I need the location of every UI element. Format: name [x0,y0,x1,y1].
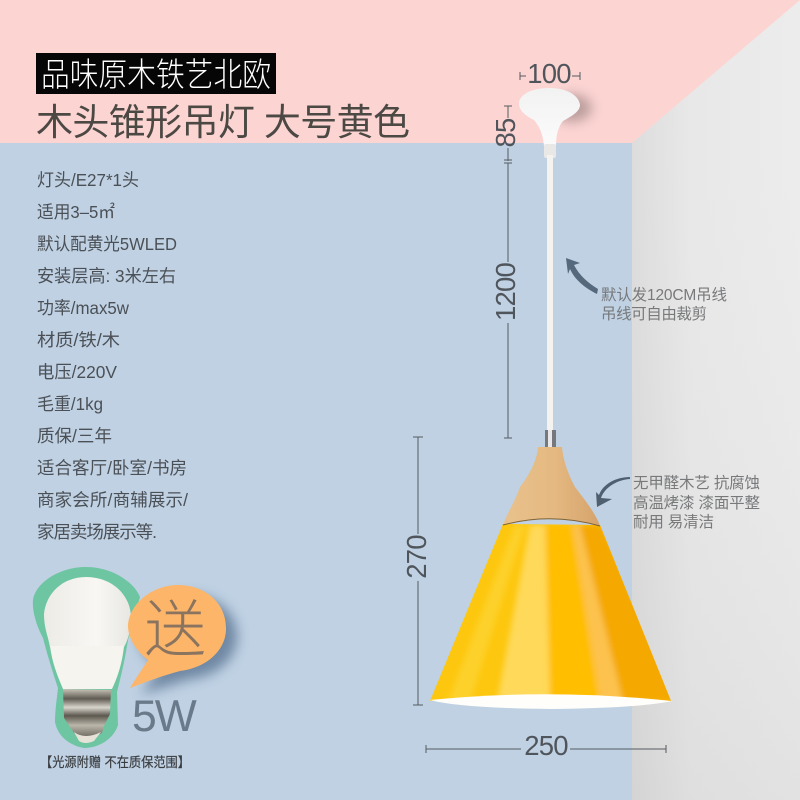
wood seam [503,519,600,526]
note: cord length: 默认发120CM吊线 [601,286,727,304]
specification list: 毛重/1kg [37,394,103,414]
icon: LED bulb [33,567,140,748]
specification list: 适用3–5㎡ [37,202,115,222]
specification list: 适合客厅/卧室/书房 [37,458,187,478]
note: wood craft: 高温烤漆 漆面平整 [633,494,760,512]
ceiling canopy [519,88,580,146]
specification list [37,170,188,542]
dimension: 250 shade width: 250 [524,730,568,761]
cord grip [544,144,556,158]
wattage label: 5W [132,692,197,741]
specification list: 灯头/E27*1头 [37,170,139,190]
specification list: 商家会所/商辅展示/ [37,490,188,510]
dimension: 1200 cord length: 1200 [490,263,521,321]
dimension: 270 shade height [401,437,432,705]
yellow shade [425,520,680,705]
specification list: 质保/三年 [37,426,112,446]
ceiling canopy shadow [552,94,592,122]
cord [547,155,553,433]
bulb disclaimer: 【光源附赠 不在质保范围】 [40,755,190,770]
shade opening [430,694,672,709]
dimension: 270 shade height: 270 [401,535,432,579]
specification list: 家居卖场展示等. [37,522,157,542]
dimension: 85 canopy height: 85 [490,118,521,148]
note: wood craft: 耐用 易清洁 [633,513,714,531]
arrow: cord note [566,258,598,294]
specification list: 功率/max5w [37,298,129,318]
specification list: 默认配黄光5WLED [37,234,177,254]
speech bubble: gift [128,585,237,694]
specification list: 安装层高: 3米左右 [37,266,176,286]
background: blue wall [0,143,632,800]
note: wood craft: 无甲醛木艺 抗腐蚀 [633,474,760,492]
shade highlight streaks [448,525,680,702]
bubble character: 送 [144,596,206,665]
badge: tagline: 品味原木铁艺北欧 [41,56,271,93]
specification list: 电压/220V [37,362,117,382]
dimension: 100 canopy width: 100 [527,58,571,89]
note: wood craft [633,474,760,531]
pendant lamp [425,88,680,709]
dimension: 250 shade width [426,730,666,761]
dimension: 85 canopy height [490,106,521,163]
title: 木头锥形吊灯 大号黄色 [36,102,410,143]
bulb glass dome [44,577,131,647]
background: grey wall [632,0,800,800]
arrow: wood note [596,477,630,507]
bubble shape [128,585,226,688]
bulb tip [74,732,101,743]
bulb screw base [63,689,111,738]
bubble shadow [139,595,237,694]
note: cord length: 吊线可自由裁剪 [601,305,707,323]
metal ferrule [545,430,556,447]
bulb neck [50,646,124,689]
wooden cap [503,447,600,526]
specification list: 材质/铁/木 [37,330,120,350]
note: cord length [601,286,727,323]
bulb green halo [33,567,140,748]
dimension: 1200 cord length [490,163,521,438]
